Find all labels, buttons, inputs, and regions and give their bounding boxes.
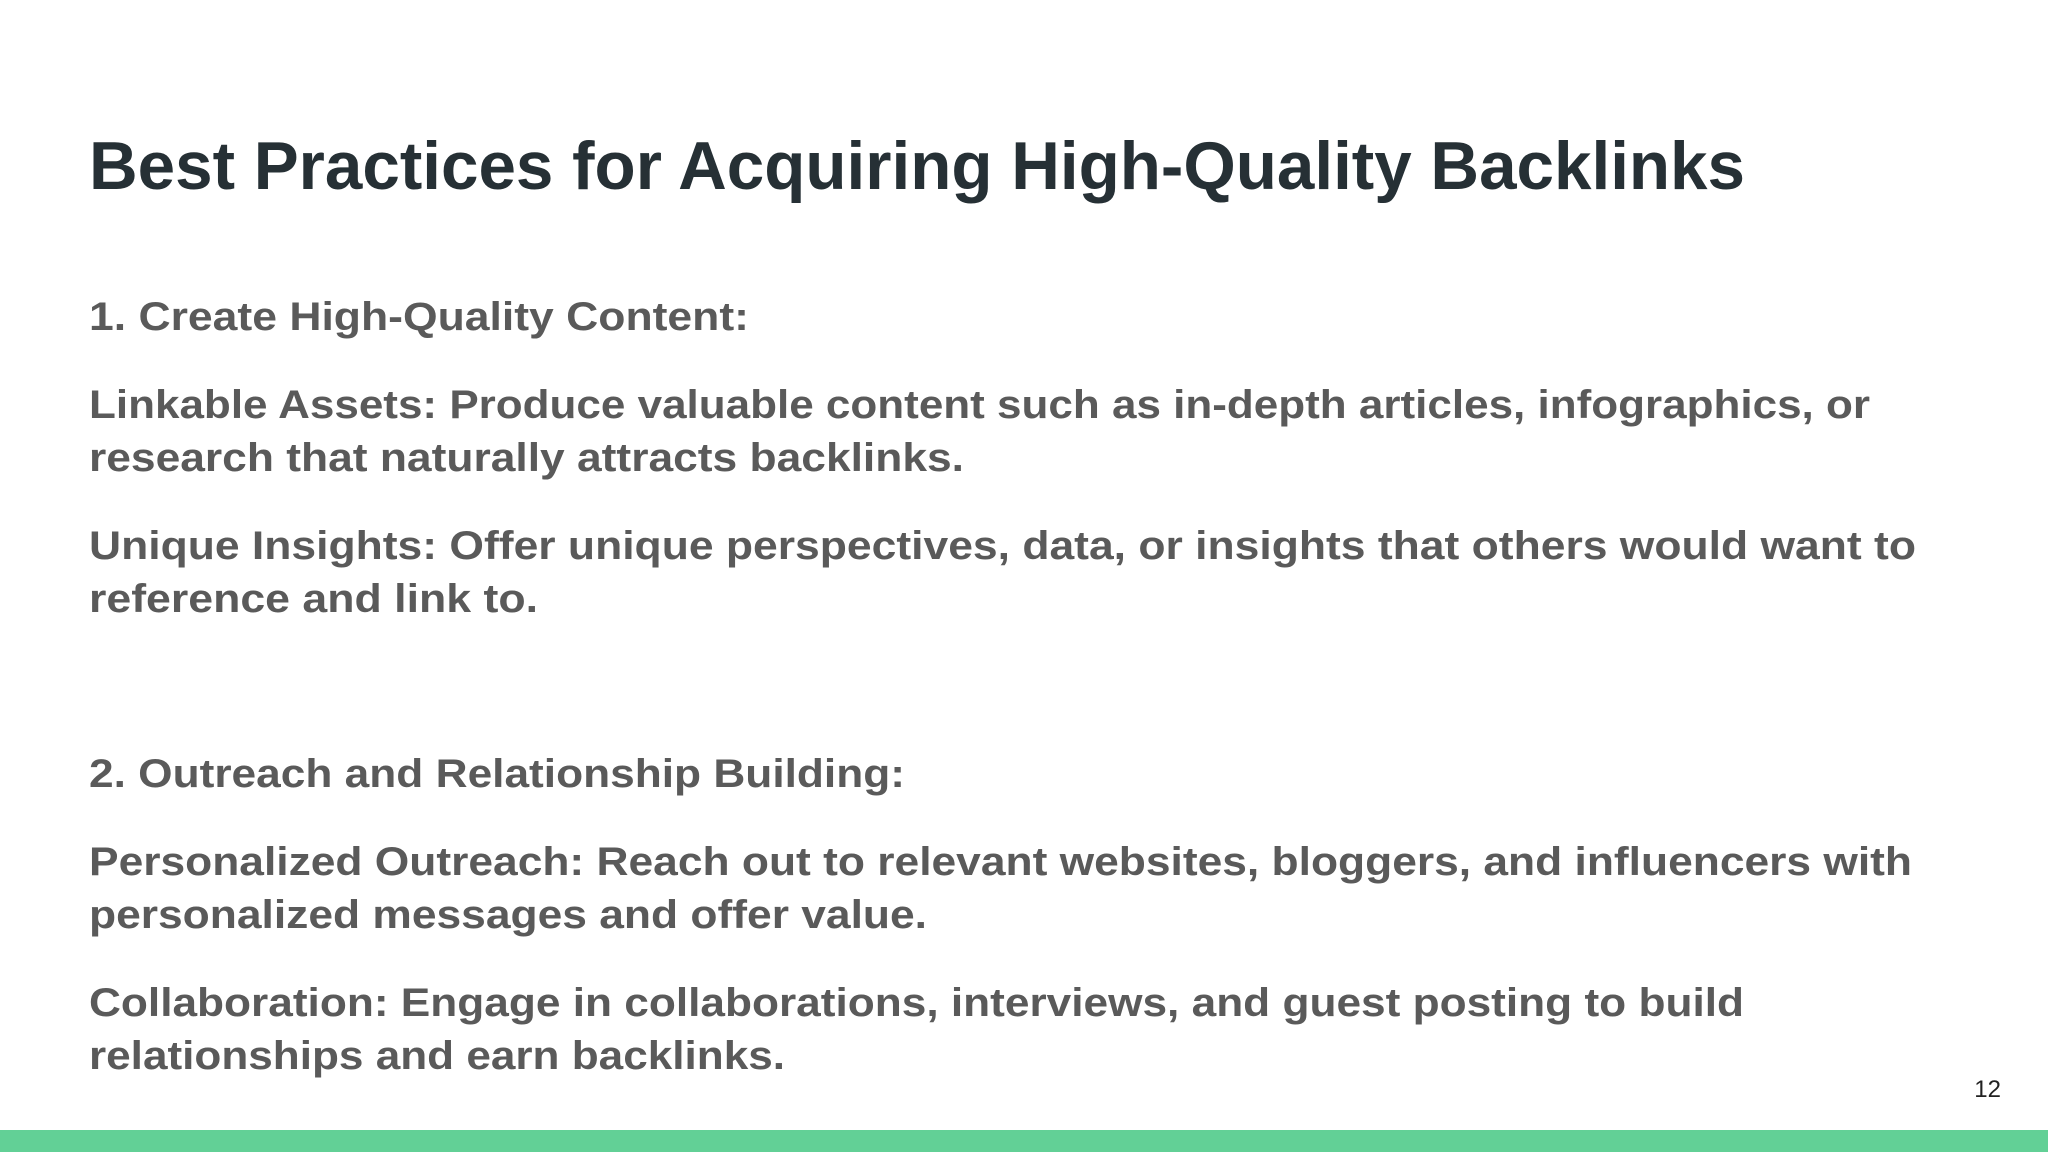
- section 2: outreach and relationship building: [89, 752, 1912, 1078]
- text block: linkable assets: Linkable Assets: Produce valuable content such as in-depth articles, infographics, or: [89, 383, 1870, 427]
- section 1: create high-quality content: [89, 295, 1916, 621]
- text block: personalized outreach: Personalized Outreach: Reach out to relevant websites, bloggers, and influencers with: [89, 840, 1912, 884]
- heading: section 1: 1. Create High-Quality Content:: [89, 295, 749, 339]
- text block: unique insights: reference and link to.: [89, 577, 538, 621]
- heading: section 2: 2. Outreach and Relationship Building:: [89, 752, 905, 796]
- text block: collaboration: [89, 981, 1744, 1078]
- text block: personalized outreach: [89, 840, 1912, 937]
- footer bar: [0, 1130, 2048, 1152]
- title: Best Practices for Acquiring High-Quality Backlinks: [89, 128, 1745, 204]
- text block: unique insights: Unique Insights: Offer unique perspectives, data, or insights that others would want to: [89, 524, 1916, 568]
- text block: unique insights: [89, 524, 1916, 621]
- text block: linkable assets: research that naturally attracts backlinks.: [89, 436, 964, 480]
- text block: collaboration: Collaboration: Engage in collaborations, interviews, and guest posting to build: [89, 981, 1744, 1025]
- text block: linkable assets: [89, 383, 1870, 480]
- text block: personalized outreach: personalized messages and offer value.: [89, 893, 927, 937]
- text block: collaboration: relationships and earn backlinks.: [89, 1034, 785, 1078]
- page number: 12: [1974, 1076, 2001, 1103]
